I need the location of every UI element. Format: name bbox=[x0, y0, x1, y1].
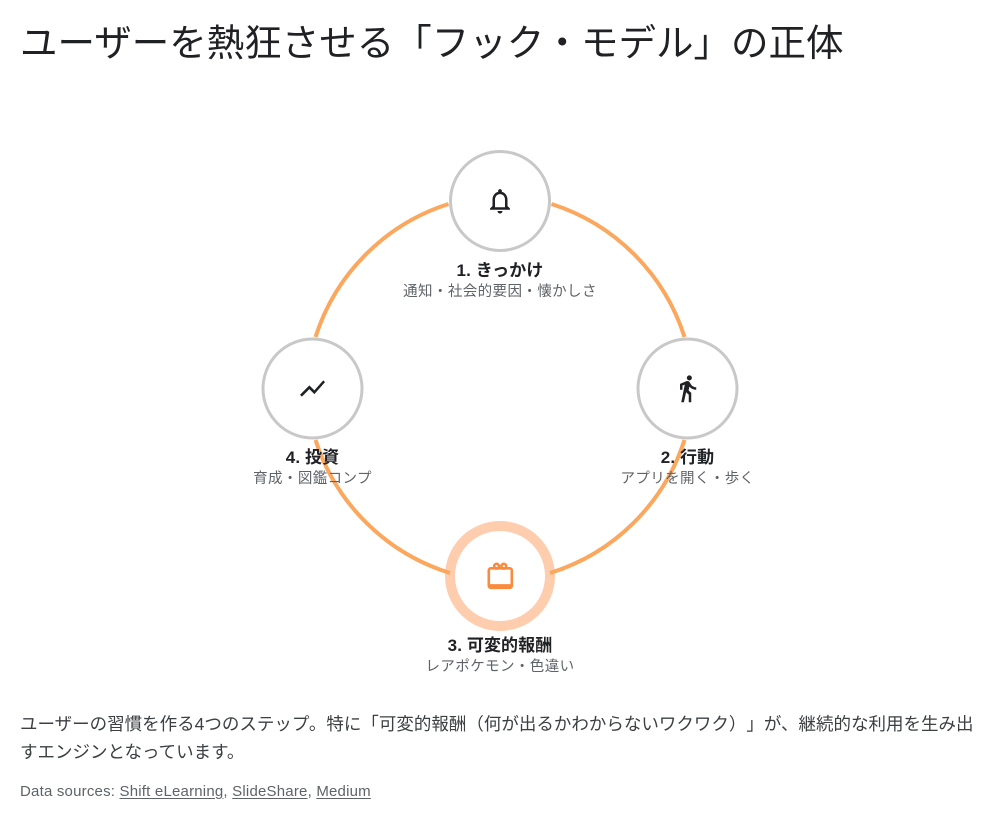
icon: line chart bbox=[300, 380, 325, 397]
label: step 4 bbox=[253, 448, 372, 487]
label: step 1 bbox=[403, 261, 597, 300]
title: ユーザーを熱狂させる「フック・モデル」の正体 bbox=[20, 22, 844, 64]
node: step 4 circle bbox=[263, 339, 362, 438]
description text: ユーザーの習慣を作る4つのステップ。特に「可変的報酬（何が出るかわからないワクワク）」が、継続的な利用を生み出すエンジンとなっています。 bbox=[20, 714, 974, 762]
arrow: arc from step 3 to step 4 bbox=[316, 440, 450, 573]
label: step 1: 1. きっかけ bbox=[457, 261, 543, 280]
label: step 3 bbox=[426, 636, 574, 675]
node: step 2 circle bbox=[638, 339, 737, 438]
node: step 3 highlighted circle bbox=[450, 526, 550, 626]
icon: gift box bbox=[489, 564, 512, 588]
arrow: arc from step 4 to step 1 bbox=[316, 204, 448, 337]
label: step 4: 育成・図鑑コンプ bbox=[253, 471, 372, 487]
arrow: arc from step 1 to step 2 bbox=[552, 204, 684, 337]
arrow: arc from step 2 to step 3 bbox=[550, 440, 684, 573]
node: step 1 circle bbox=[450, 152, 550, 250]
data sources: Data sources: Shift eLearning, SlideShare, Medium bbox=[20, 783, 371, 800]
icon: bell bbox=[490, 189, 510, 214]
label: step 4: 4. 投資 bbox=[286, 448, 339, 467]
icon: walking person bbox=[680, 375, 696, 402]
label: step 2: 2. 行動 bbox=[661, 448, 714, 467]
label: step 3: レアポケモン・色違い bbox=[426, 659, 574, 675]
label: step 2: アプリを開く・歩く bbox=[620, 471, 755, 487]
label: step 2 bbox=[620, 448, 755, 487]
label: step 3: 3. 可変的報酬 bbox=[448, 636, 552, 655]
label: step 1: 通知・社会的要因・懐かしさ bbox=[403, 284, 597, 300]
